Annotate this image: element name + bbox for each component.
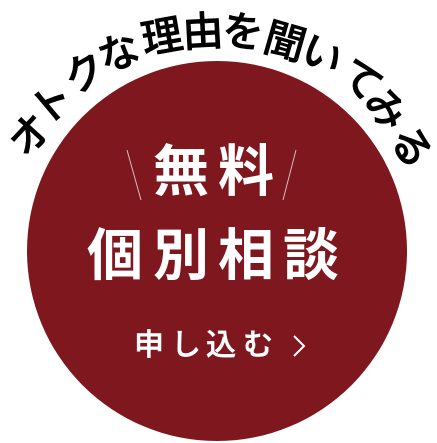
icon: chevron arrow <box>294 336 304 356</box>
arc heading: 由 <box>181 8 225 56</box>
arc heading: な <box>92 24 146 82</box>
arc heading: を <box>219 6 267 58</box>
apply label: 込 <box>206 329 236 362</box>
individual consultation heading <box>87 224 339 287</box>
arc heading <box>0 6 437 176</box>
individual consultation heading: 個 <box>87 224 143 287</box>
free label <box>153 140 274 203</box>
free label: 料 <box>218 140 274 203</box>
individual consultation heading: 談 <box>283 224 339 287</box>
individual consultation heading: 別 <box>153 224 209 287</box>
arc heading: オ <box>0 104 61 166</box>
arc heading: ト <box>22 73 82 135</box>
arc heading: 聞 <box>259 14 311 70</box>
apply label <box>134 329 273 362</box>
arc heading: ク <box>56 43 114 103</box>
apply label: 申 <box>134 329 164 362</box>
arc heading: 理 <box>138 11 186 63</box>
left accent line <box>127 150 141 200</box>
free label: 無 <box>153 140 209 203</box>
arc heading: い <box>293 25 351 85</box>
apply label: し <box>171 329 201 362</box>
red circle <box>27 61 407 441</box>
apply label: む <box>243 329 273 362</box>
arc heading: て <box>331 49 391 111</box>
right accent line <box>283 150 296 200</box>
arc heading: み <box>355 78 417 140</box>
individual consultation heading: 相 <box>218 224 274 287</box>
